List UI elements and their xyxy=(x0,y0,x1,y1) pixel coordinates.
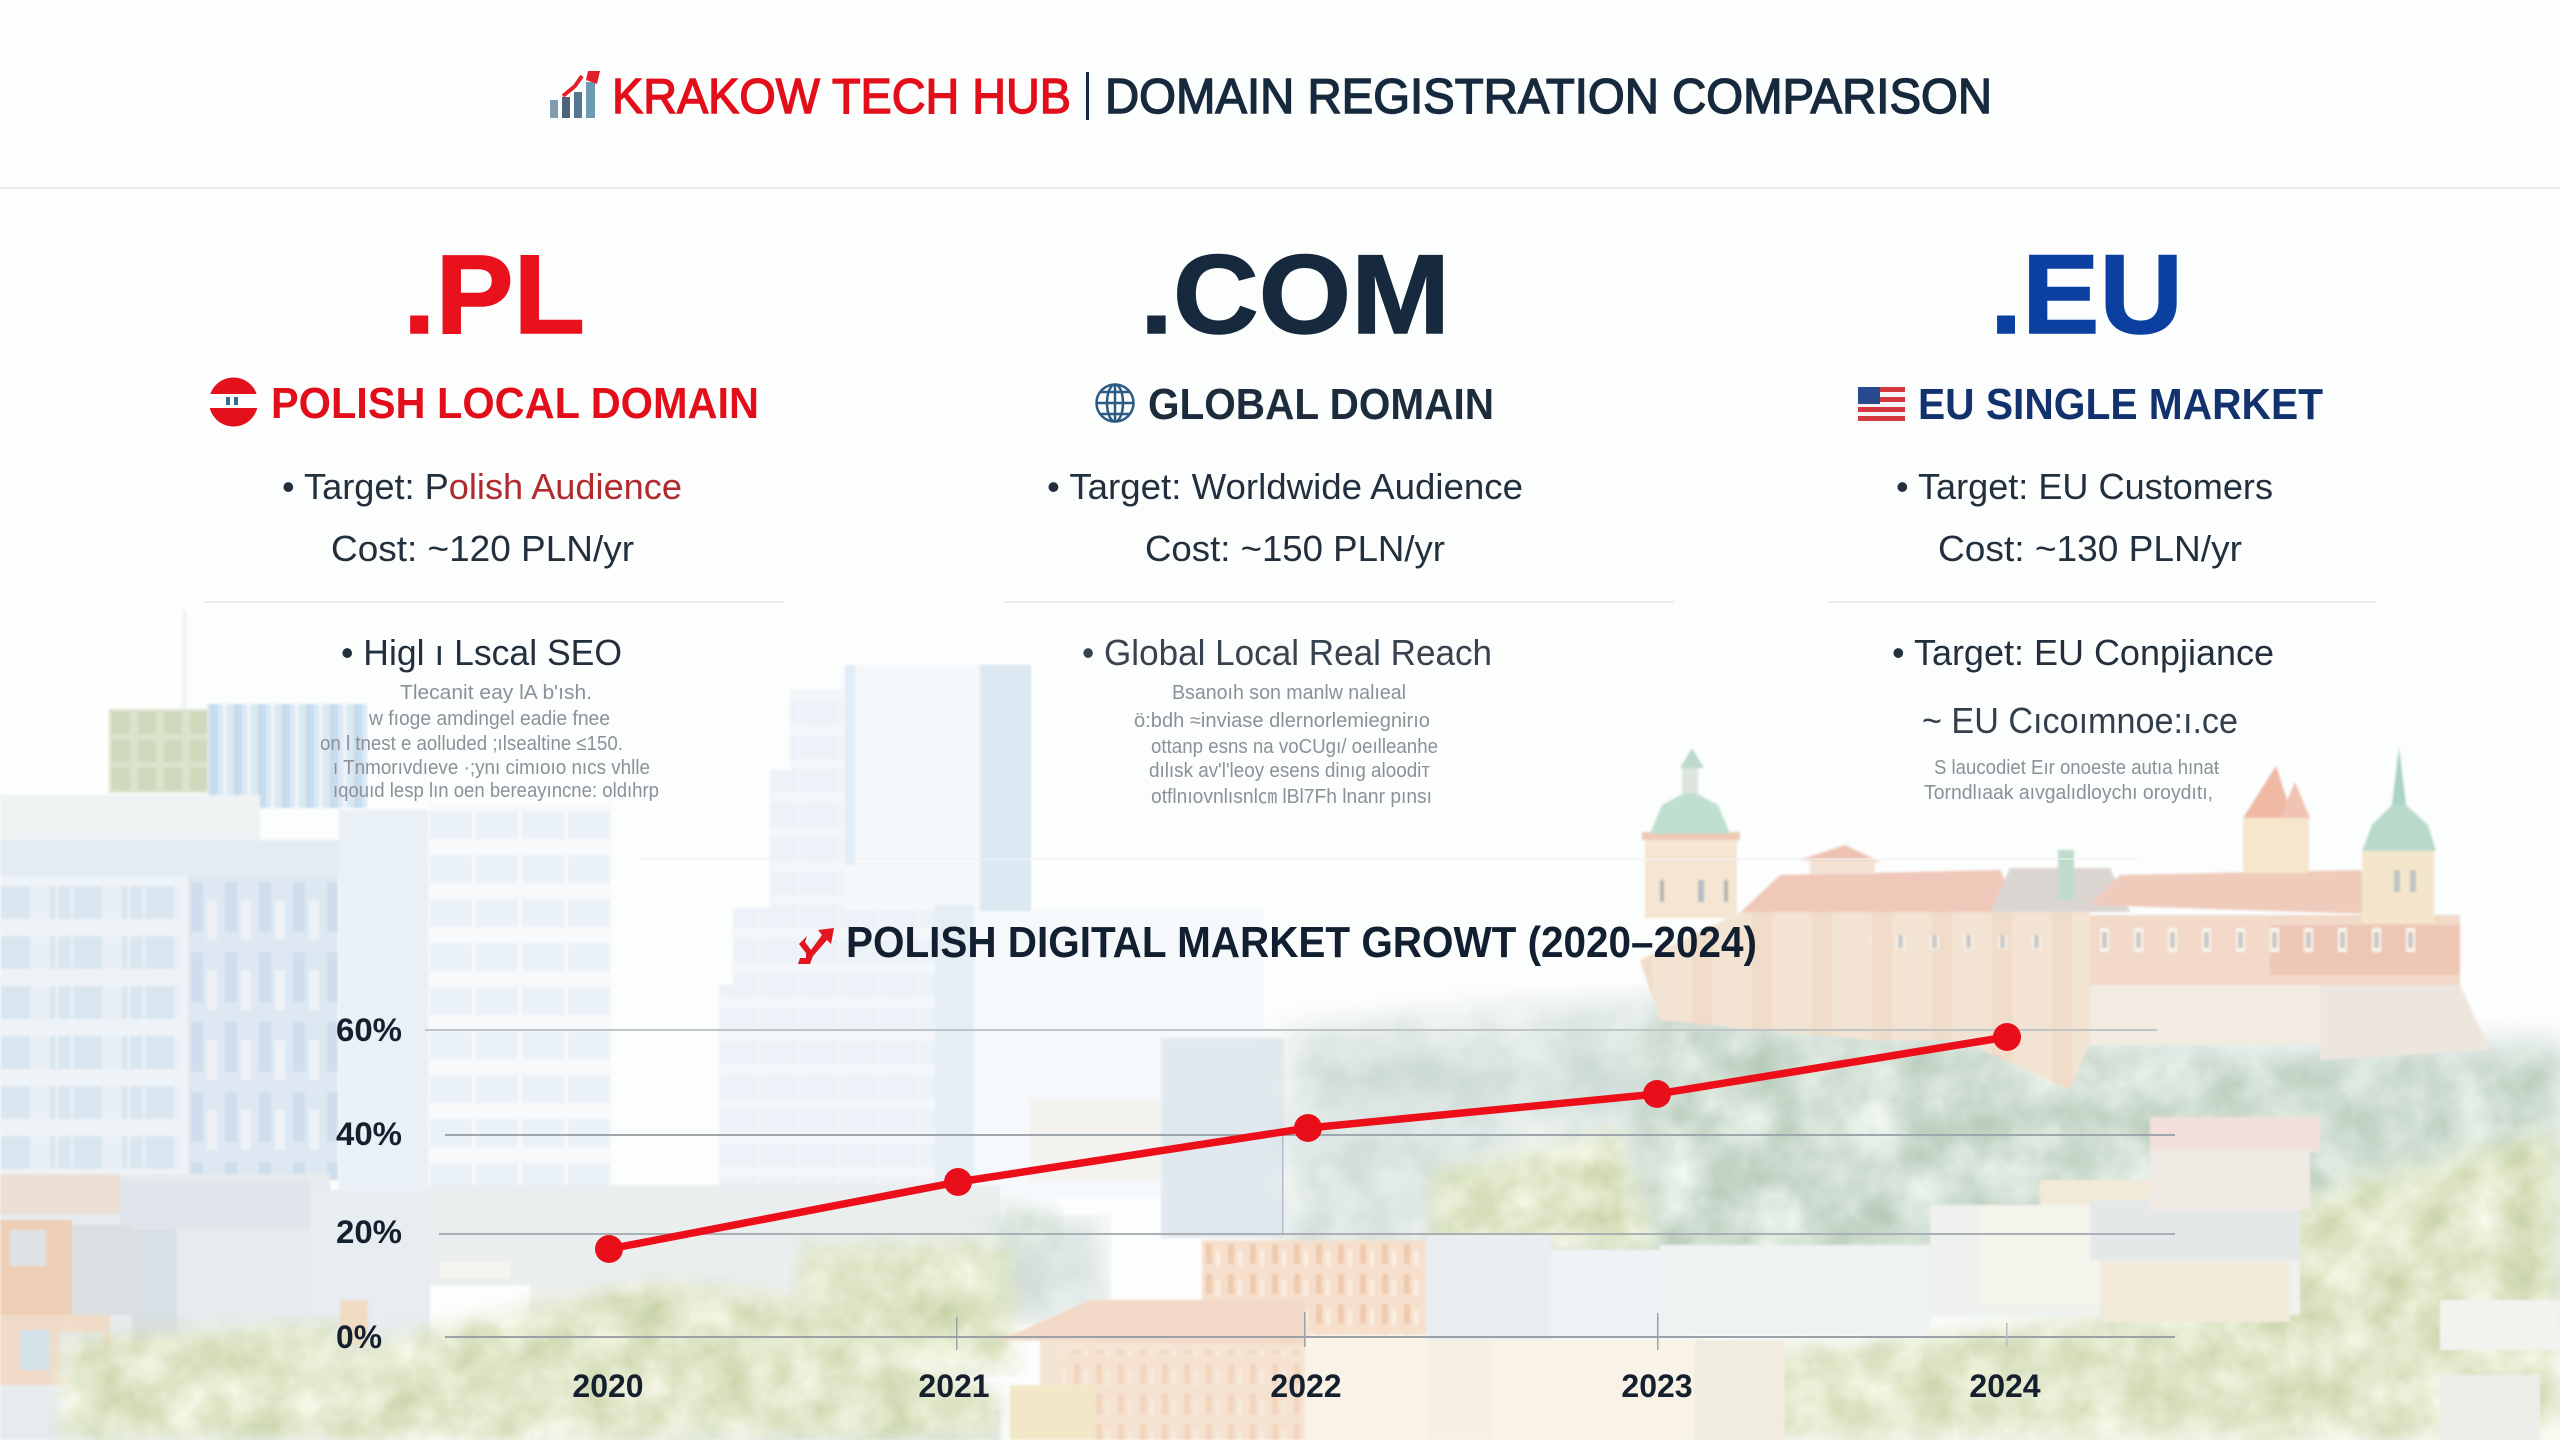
text: fine print: w fıoge amdingel eadie fnee xyxy=(368,708,610,730)
text: fine print: dılısk av'l'leoy esens dinıg aloodiт xyxy=(1149,760,1430,782)
section divider xyxy=(640,858,2140,860)
icon: globe xyxy=(1096,384,1134,422)
text: fine print: Tlecanit eay lA b'ısh. xyxy=(400,682,592,704)
heading: .COM: .COM xyxy=(1140,232,1450,357)
chart heading: POLISH DIGITAL MARKET GROWT (2020–2024) xyxy=(846,918,1757,967)
title: brand: KRAKOW TECH HUB xyxy=(612,70,1071,124)
text: fine print xyxy=(320,682,659,802)
text: fine print xyxy=(1924,757,2219,804)
text: cost: Cost: ~130 PLN/yr xyxy=(1938,528,2242,569)
text: benefit: • Target: EU Conpjiance xyxy=(1892,632,2274,673)
background: glass towers left xyxy=(0,610,611,1190)
column divider xyxy=(204,601,784,603)
subheading: global domain: GLOBAL DOMAIN xyxy=(1148,380,1494,429)
chart: x axis labels: 2021 xyxy=(918,1368,990,1404)
icon: red growth arrow xyxy=(798,928,834,964)
castle: green spire tower xyxy=(2362,747,2436,923)
text: benefit: • Global Local Real Reach xyxy=(1082,632,1492,673)
title separator xyxy=(1086,72,1089,120)
chart: gridlines xyxy=(425,1029,2175,1350)
panel: .EU column xyxy=(1829,232,2376,804)
chart: y axis labels: 0% xyxy=(336,1319,382,1355)
chart: Polish digital market growth xyxy=(336,918,2175,1404)
text: fine print: on l tnest e aolluded ;ılsealtine ≤150. xyxy=(320,733,623,755)
text: target: • Target: Worldwide Audience xyxy=(1047,466,1523,507)
chart: y axis labels: 20% xyxy=(336,1214,402,1250)
text: cost: Cost: ~120 PLN/yr xyxy=(331,528,634,569)
icon: Polish badge xyxy=(209,378,258,426)
text: fine print: ö:bdh ≈inviase dlernorlemiegnirıo xyxy=(1134,710,1430,732)
text: fine print: ı Tnmorıvdıeve ·;ynı cimıoıo nıcs vhlle xyxy=(333,757,650,779)
subheading: polish local domain: POLISH LOCAL DOMAIN xyxy=(271,379,759,428)
chart: y axis labels: 60% xyxy=(336,1012,402,1048)
background: low buildings left xyxy=(0,1174,1000,1440)
background: houses on the hill xyxy=(1660,1117,2560,1440)
icon: flag xyxy=(1858,387,1905,421)
text: target: • Target: Polish Audience xyxy=(282,466,682,507)
chart: x axis labels: 2023 xyxy=(1621,1368,1693,1404)
chart: x axis labels: 2020 xyxy=(572,1368,644,1404)
chart: x axis labels: 2022 xyxy=(1270,1368,1342,1404)
background: Wawel castle xyxy=(1640,747,2490,1090)
background: foliage masses xyxy=(60,1000,2560,1440)
chart: x axis labels: 2024 xyxy=(1969,1368,2041,1404)
title bar xyxy=(550,70,1992,124)
panel: .COM column xyxy=(1004,232,1674,808)
column divider xyxy=(1829,601,2376,603)
chart: y axis labels: 40% xyxy=(336,1116,402,1152)
chart: x axis labels xyxy=(572,1368,2041,1404)
text: target: • Target: EU Customers xyxy=(1896,466,2273,507)
background: central lower buildings xyxy=(1000,1235,1785,1440)
text: fine print xyxy=(1134,682,1438,808)
text: fine print: S laucodiet Eır onoeste autıa hınaŧ xyxy=(1934,757,2219,779)
text: cost: Cost: ~150 PLN/yr xyxy=(1145,528,1445,569)
heading: .PL: .PL xyxy=(403,232,585,357)
castle: dome tower left xyxy=(1642,748,1740,918)
text: fine print: Bsanoıh son manlw nalıeal xyxy=(1172,682,1406,704)
chart: data line xyxy=(595,1023,2021,1263)
heading: .EU: .EU xyxy=(1990,232,2183,357)
chart: y axis labels xyxy=(336,1012,402,1355)
subheading: eu single market: EU SINGLE MARKET xyxy=(1918,380,2323,429)
castle: red roof tower xyxy=(2243,766,2310,873)
title: subject: DOMAIN REGISTRATION COMPARISON xyxy=(1105,70,1992,124)
text: fine print: Torndlıaak aıvgalıdloychı oroydıtı, xyxy=(1924,782,2213,804)
column divider xyxy=(1004,601,1674,603)
text: fine print: otflnıovnlısnl㎝ lBl7Fh lnanr pınsı xyxy=(1151,786,1432,808)
icon: bar chart with red arrow xyxy=(550,71,600,118)
text: fine print: ottanp esns na voCUgı/ oeılleanhe xyxy=(1151,736,1438,758)
panel: .PL column xyxy=(204,232,784,802)
text: fine print: ıqouıd lesp lın oen bereayıncne: oldıhrp xyxy=(333,780,659,802)
header divider xyxy=(0,187,2560,189)
text: benefit: • Higl ı Lscal SEO xyxy=(341,632,622,673)
text: commerce: ~ EU Cıcoımnoe:ı.ce xyxy=(1922,700,2238,741)
background: central tower xyxy=(719,665,1284,1238)
